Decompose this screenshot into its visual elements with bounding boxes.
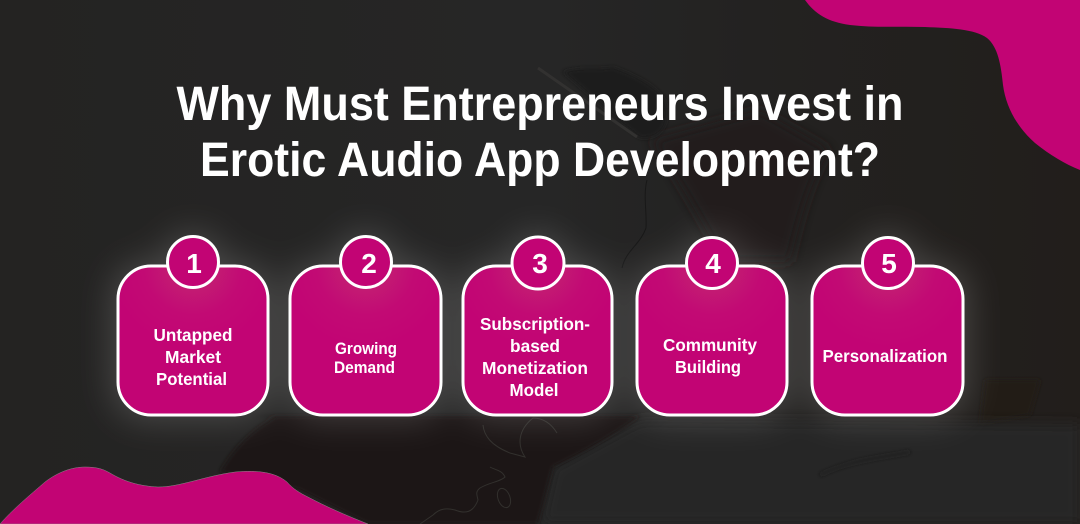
card 5: Personalization [812,238,963,415]
card 1: Untapped Market Potential: Market [165,347,221,367]
title [176,78,904,187]
card 2: Growing Demand: Growing [335,340,397,358]
title: Why Must Entrepreneurs Invest in [176,78,904,131]
decorative blob: top right [805,0,1080,170]
card 2: Growing Demand [290,236,441,415]
card 3: Subscription-based Monetization Model [463,237,612,415]
card 2: Growing Demand: Demand [334,359,395,377]
card glow behind cards [112,232,969,420]
card 3: Subscription-based Monetization Model: Subscription- [480,314,590,334]
card 5: Personalization: Personalization [822,346,948,366]
decorative blob: bottom left [0,467,368,524]
card 2: Growing Demand: 2 [361,248,377,279]
card 1: Untapped Market Potential: Untapped [154,325,232,345]
card 3: Subscription-based Monetization Model: based [510,336,560,356]
card 4: Community Building [637,238,787,415]
title: Erotic Audio App Development? [200,134,880,187]
card 4: Community Building: Building [675,357,741,377]
card 4: Community Building: 4 [705,248,721,279]
card 1: Untapped Market Potential: Potential [156,369,227,389]
card 1: Untapped Market Potential: 1 [186,248,202,279]
card 4: Community Building: Community [663,335,757,355]
card 3: Subscription-based Monetization Model: Model [510,380,558,400]
card 1: Untapped Market Potential [118,236,268,415]
card 5: Personalization: 5 [881,248,897,279]
card 3: Subscription-based Monetization Model: 3 [532,248,548,279]
card 3: Subscription-based Monetization Model: Monetization [482,358,588,378]
